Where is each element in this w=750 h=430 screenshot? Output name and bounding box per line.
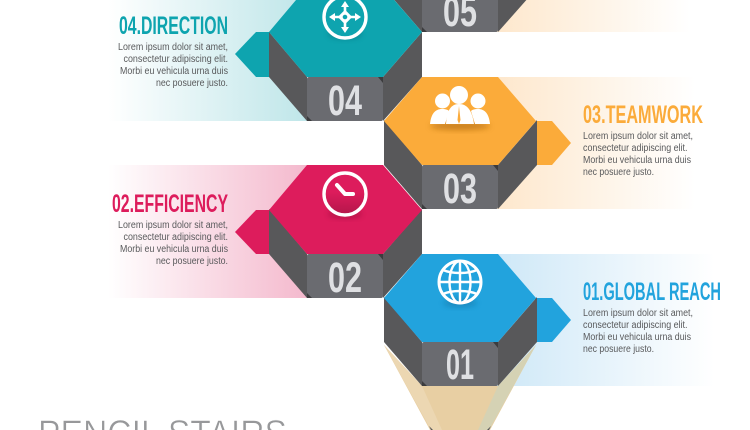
number 01: 01 — [446, 341, 474, 389]
number 02: 02 — [328, 254, 362, 302]
text block: 03 description: Lorem ipsum dolor sit amet, — [583, 131, 693, 142]
band: 04 direction — [100, 0, 307, 121]
hexagon 03 — [384, 77, 536, 165]
pencil tip — [384, 345, 536, 430]
text block: 03 description: nec posuere justo. — [583, 167, 654, 178]
heading: 04.direction: 04.DIRECTION — [119, 12, 228, 40]
stair 01 — [384, 254, 571, 389]
band: 05 teamwork continuation — [460, 0, 700, 32]
text block: 01 description: consectetur adipiscing elit. — [583, 320, 688, 331]
stair 05: number block — [384, 0, 537, 36]
stair 02 — [235, 165, 422, 302]
band: 01 global reach — [460, 254, 725, 386]
hexagon 04 — [269, 0, 422, 77]
number 03: 03 — [443, 165, 477, 213]
text block: 01 description: Lorem ipsum dolor sit amet, — [583, 308, 693, 319]
number 04: 04 — [328, 77, 362, 125]
text block: 03 description — [583, 131, 693, 178]
text block: 02 description: Lorem ipsum dolor sit amet, — [118, 220, 228, 231]
icon: team — [430, 86, 490, 130]
icon: compass — [324, 0, 366, 39]
hexagon 01 — [384, 254, 536, 342]
text block: 02 description: consectetur adipiscing elit. — [124, 232, 228, 243]
icon: clock — [324, 173, 366, 218]
text block: 04 description — [118, 42, 228, 89]
icon: globe — [439, 261, 481, 307]
text block: 04 description: nec posuere justo. — [156, 78, 228, 89]
stair 03 — [384, 77, 571, 213]
text block: 04 description: consectetur adipiscing elit. — [124, 54, 228, 65]
tab 02 — [235, 210, 270, 254]
text block: 02 description — [118, 220, 228, 267]
tab 04 — [235, 32, 270, 77]
text block: 02 description: nec posuere justo. — [156, 256, 228, 267]
tab 01 — [535, 298, 571, 342]
text block: 03 description: consectetur adipiscing elit. — [583, 143, 688, 154]
band: 03 teamwork — [460, 77, 705, 209]
text block: 03 description: Morbi eu vehicula urna duis — [583, 155, 691, 166]
heading: 02.efficiency: 02.EFFICIENCY — [112, 190, 228, 218]
text block: 01 description: nec posuere justo. — [583, 344, 654, 355]
text block: 01 description: Morbi eu vehicula urna duis — [583, 332, 691, 343]
stair 04 — [235, 0, 422, 125]
text block: 04 description: Morbi eu vehicula urna duis — [120, 66, 228, 77]
text block: 04 description: Lorem ipsum dolor sit amet, — [118, 42, 228, 53]
text block: 02 description: Morbi eu vehicula urna duis — [120, 244, 228, 255]
hexagon 02 — [269, 165, 422, 254]
band: 02 efficiency — [100, 165, 307, 298]
text block: 01 description — [583, 308, 693, 355]
tab 03 — [535, 121, 571, 165]
